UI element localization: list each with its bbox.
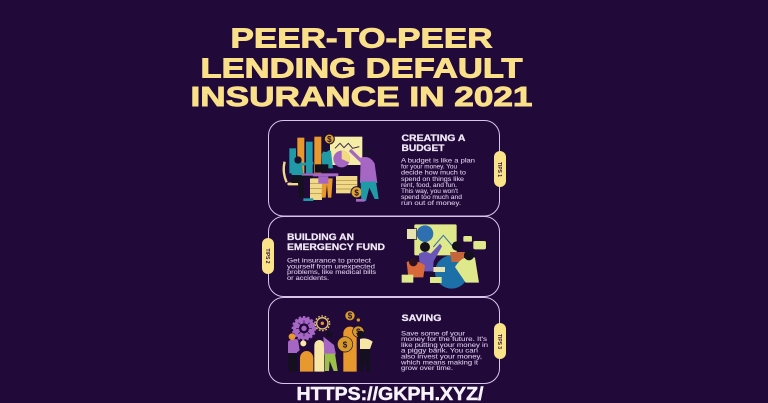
- title: [190, 22, 532, 112]
- title: PEER-TO-PEER: [230, 22, 492, 54]
- body text: which means making it: [400, 359, 478, 366]
- panel: building an emergency fund: [262, 216, 500, 296]
- body text: yourself from unexpected: [287, 263, 376, 270]
- heading: CREATING A: [402, 133, 466, 144]
- heading: BUILDING AN: [287, 232, 354, 243]
- body text: Get insurance to protect: [287, 258, 371, 264]
- body text: spend too much and: [401, 194, 462, 201]
- heading: [402, 133, 466, 154]
- body text: spend on things like: [401, 176, 464, 183]
- body text: decide how much to: [401, 170, 467, 177]
- title: LENDING DEFAULT: [200, 52, 522, 84]
- body text: also invest your money,: [401, 354, 482, 360]
- heading: BUDGET: [402, 143, 445, 154]
- body text: a piggy bank. You can: [401, 348, 479, 355]
- body text: A budget is like a plan: [401, 158, 476, 164]
- body text: [400, 330, 489, 372]
- title: INSURANCE IN 2021: [190, 81, 532, 112]
- body text: [287, 258, 376, 282]
- illustration: budget team with charts and coins: [284, 134, 379, 202]
- body text: run out of money.: [401, 200, 461, 207]
- tab: tips 2: TIPS 2: [264, 248, 270, 264]
- body text: [401, 158, 476, 207]
- tab: tips 1: TIPS 1: [496, 162, 502, 177]
- tab: tips 3: TIPS 3: [496, 334, 502, 349]
- body text: money for the future. It's: [401, 336, 487, 343]
- body text: or accidents.: [287, 275, 329, 282]
- heading: SAVING: [402, 313, 442, 324]
- tab: tips 3: [494, 323, 506, 359]
- illustration: gears, coins and growing columns: [288, 311, 373, 372]
- body text: like putting your money in: [401, 342, 489, 349]
- illustration: team around a table with charts: [402, 224, 486, 289]
- heading: EMERGENCY FUND: [287, 242, 385, 253]
- illustration: gears, coins and growing columns: $: [343, 340, 348, 349]
- body text: for your money. You: [401, 164, 457, 171]
- tab: tips 1: [494, 151, 506, 187]
- panel: creating a budget: [268, 120, 506, 216]
- body text: This way, you won't: [401, 188, 458, 195]
- illustration: gears, coins and growing columns: $: [348, 312, 353, 321]
- body text: grow over time.: [401, 365, 453, 372]
- heading: [287, 232, 385, 253]
- illustration: gears, coins and growing columns: $: [356, 328, 361, 337]
- body text: rent, food, and fun.: [401, 182, 457, 189]
- illustration: budget team with charts and coins: $: [327, 135, 332, 144]
- illustration: budget team with charts and coins: $: [354, 188, 359, 197]
- tab: tips 2: [262, 238, 274, 274]
- body text: Save some of your: [401, 330, 466, 337]
- panel: saving: [268, 298, 506, 384]
- body text: problems, like medical bills: [287, 269, 376, 276]
